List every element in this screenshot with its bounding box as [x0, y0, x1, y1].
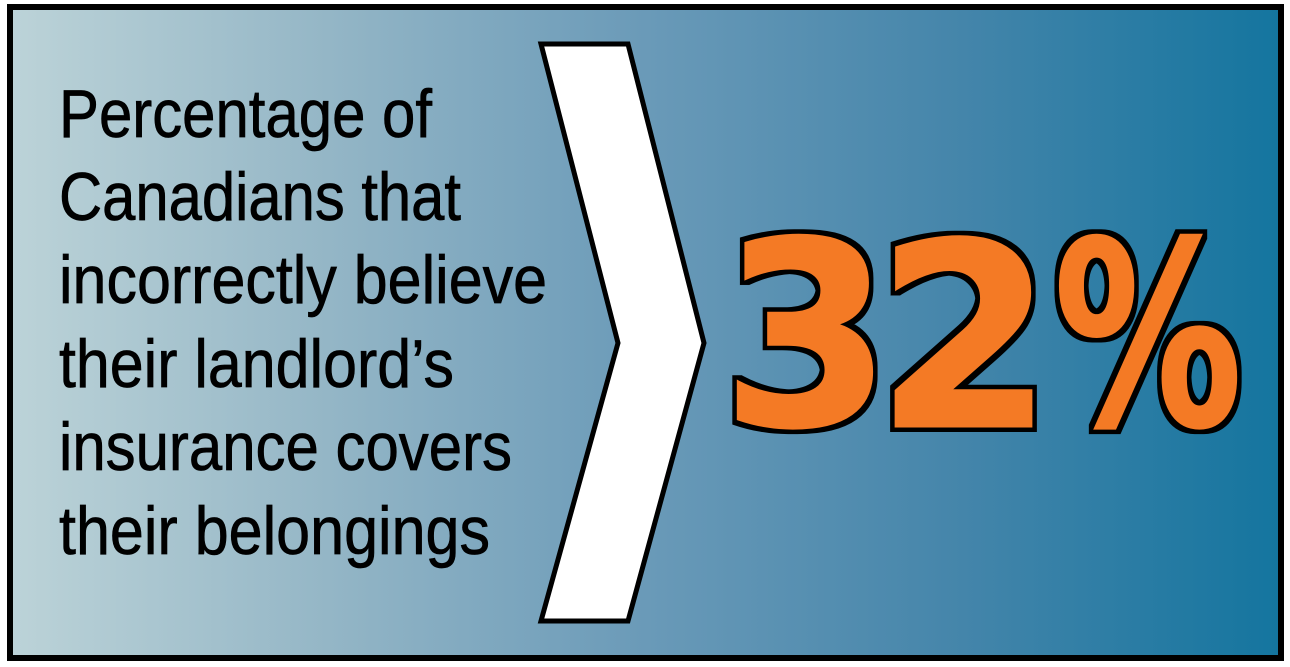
description text: Canadians that	[59, 159, 461, 235]
description text: incorrectly believe	[59, 242, 547, 318]
description text: their belongings	[59, 493, 490, 569]
description text: Percentage of	[59, 76, 432, 152]
description text	[59, 76, 547, 569]
description text: their landlord’s	[59, 326, 454, 402]
statistic 32%: 2	[876, 190, 1053, 487]
chevron arrow	[541, 44, 704, 621]
statistic 32%	[722, 188, 1242, 487]
statistic 32%: 3	[722, 188, 891, 486]
description text: insurance covers	[59, 409, 512, 485]
